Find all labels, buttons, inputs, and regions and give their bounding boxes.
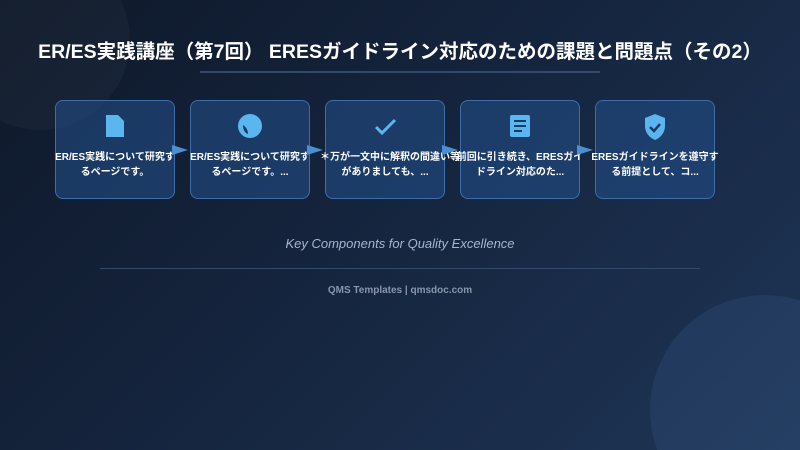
- panel: steps: [55, 100, 719, 199]
- subtitle: Key Components for Quality Excellence: [285, 236, 515, 251]
- card 5: ERESガイドラインを遵守す: [591, 152, 719, 163]
- card 3: [325, 100, 445, 199]
- card 1: ER/ES実践について研究す: [55, 152, 175, 163]
- arrow 1: [172, 145, 188, 155]
- card 4: [460, 100, 580, 199]
- footer: QMS Templates | qmsdoc.com: [328, 285, 472, 296]
- card 2: [190, 100, 310, 199]
- card 5: る前提として、コ...: [611, 167, 699, 178]
- card 3: がありましても、...: [341, 167, 429, 178]
- title: ER/ES実践講座（第7回） ERESガイドライン対応のための課題と問題点（その2）: [38, 41, 762, 63]
- card 1: るページです。: [81, 167, 149, 178]
- card 2: るページです。...: [211, 167, 289, 178]
- arrow 4: [577, 145, 593, 155]
- card 3: ＊万が一文中に解釈の間違い等: [320, 152, 460, 163]
- card 1: [55, 100, 175, 199]
- card 2: ER/ES実践について研究す: [190, 152, 310, 163]
- arrow 2: [307, 145, 323, 155]
- arrow 3: [442, 145, 458, 155]
- card 4: 前回に引き続き、ERESガイ: [457, 152, 583, 163]
- card 5: [595, 100, 715, 199]
- card 4: ドライン対応のた...: [476, 167, 564, 178]
